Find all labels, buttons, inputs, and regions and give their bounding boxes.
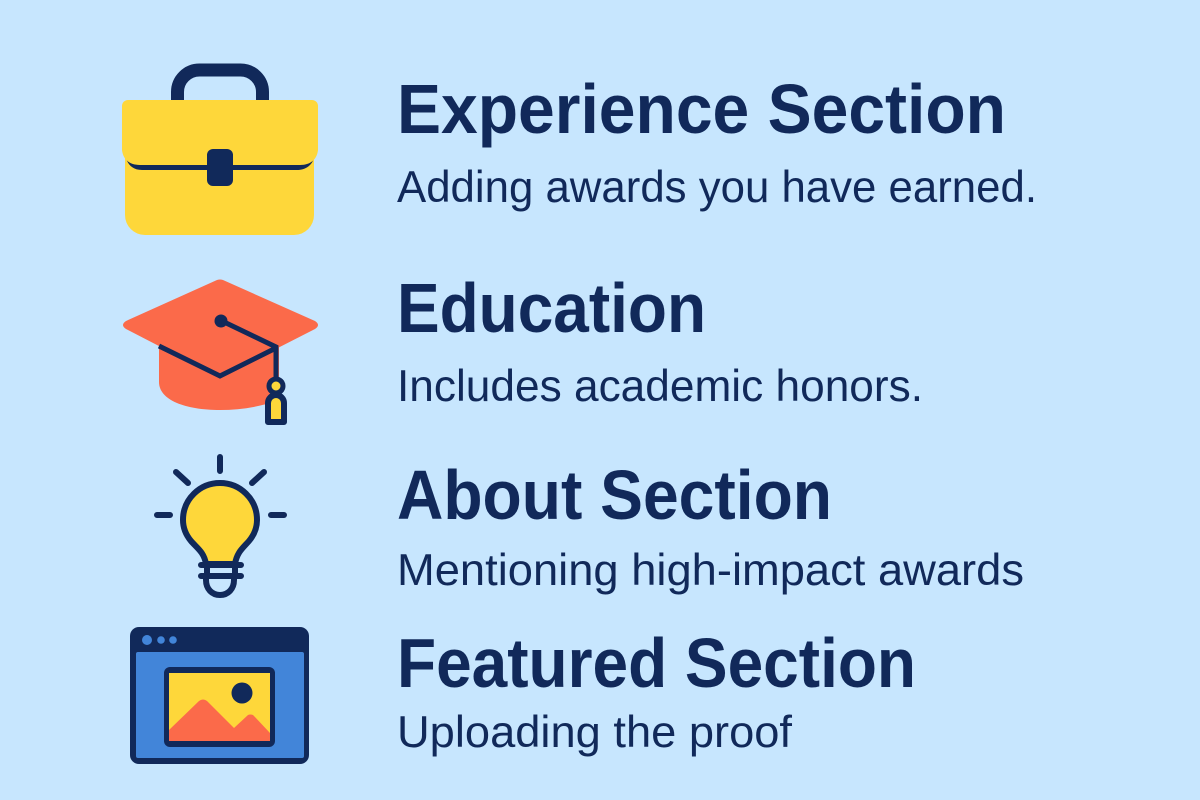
icon: browser window with picture <box>130 627 309 764</box>
heading: Education: Education <box>397 269 706 347</box>
icon: graduation cap <box>123 280 318 422</box>
heading: Experience Section: Experience Section <box>397 70 1006 148</box>
text: education description: Includes academic honors. <box>397 362 923 411</box>
text: about description: Mentioning high-impact awards <box>397 546 1024 595</box>
icon: briefcase <box>122 70 318 235</box>
text: featured description: Uploading the proof <box>397 708 793 757</box>
text: experience description: Adding awards you have earned. <box>397 163 1037 212</box>
heading: Featured Section: Featured Section <box>397 624 916 702</box>
icon: light bulb <box>157 457 284 595</box>
heading: About Section: About Section <box>397 456 832 534</box>
